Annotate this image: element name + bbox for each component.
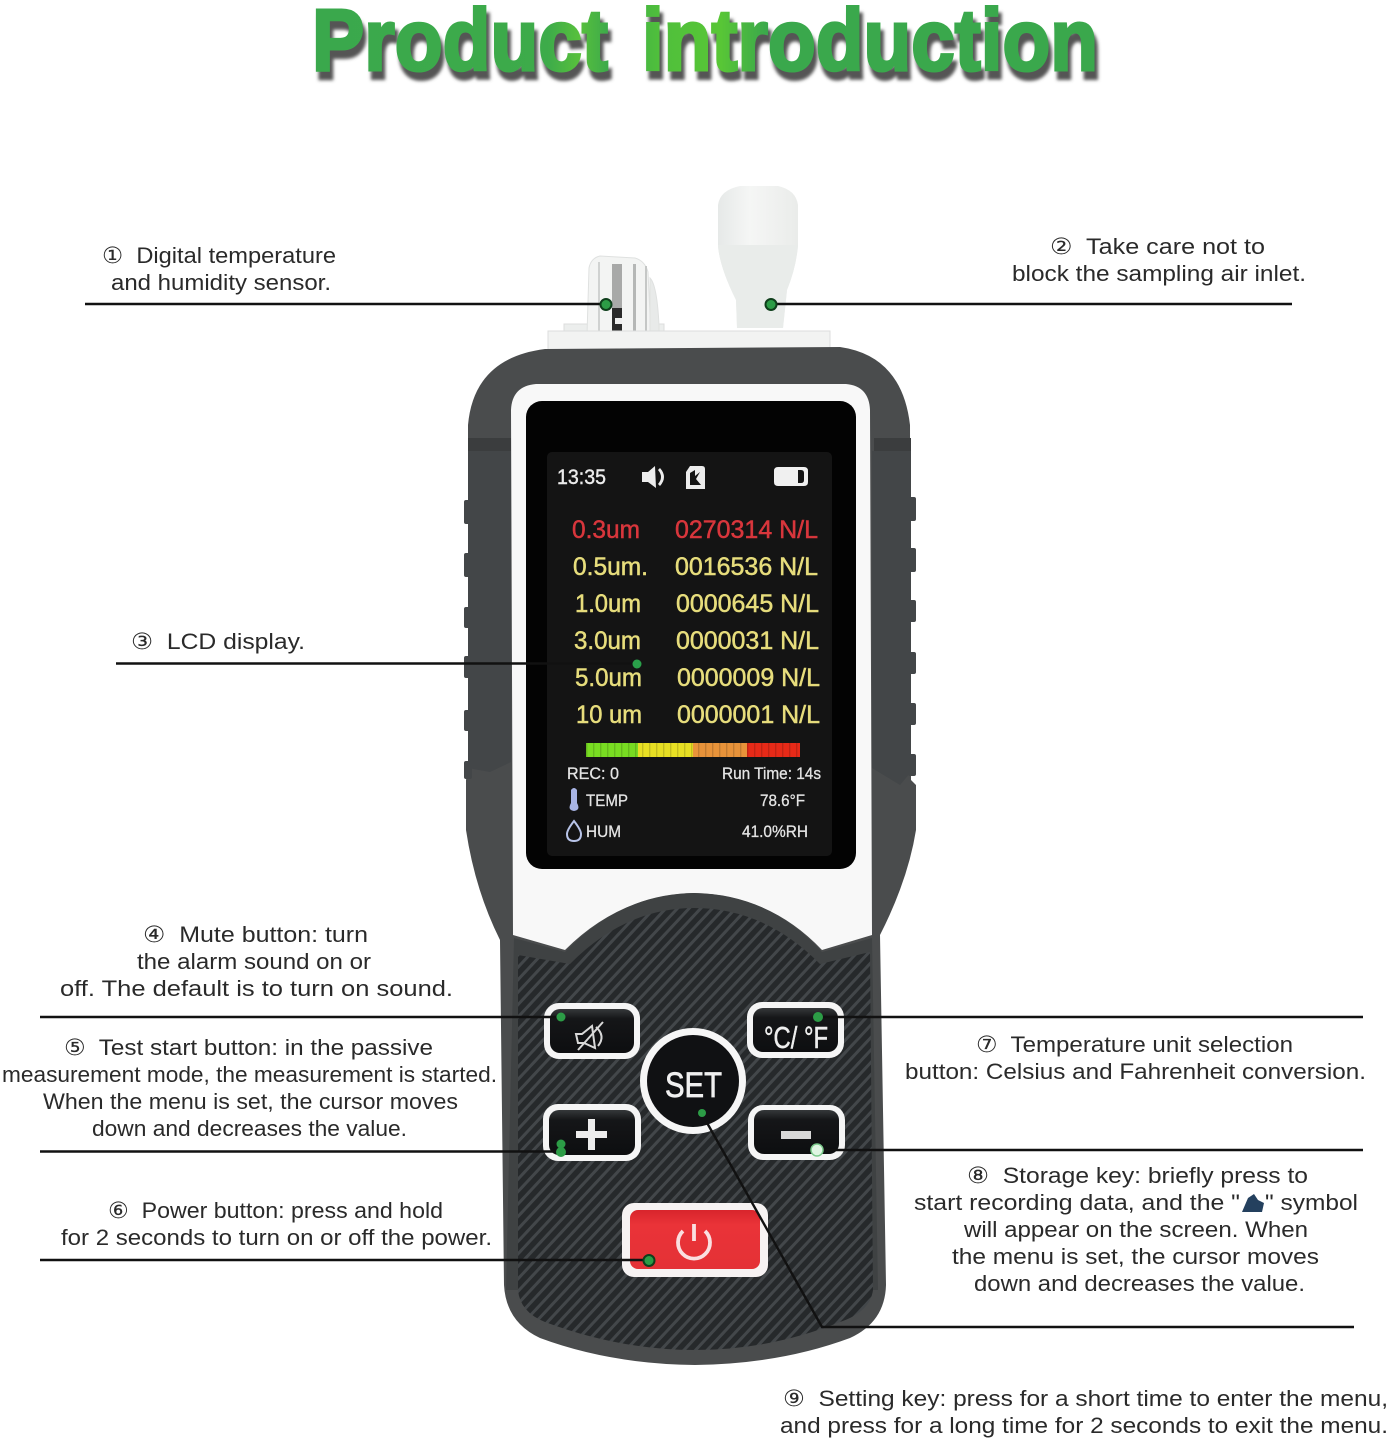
- annotation 8: storage key: " symbol: [1265, 1190, 1358, 1215]
- level bar: [586, 743, 800, 757]
- annotation 9: setting key: [780, 1386, 1388, 1438]
- particle rows: 3.0um: [574, 627, 641, 655]
- sampling air inlet: [718, 186, 798, 328]
- mute button: [544, 1003, 640, 1059]
- particle rows: 0000009 N/L: [677, 664, 820, 692]
- annotation 5: test start button: [2, 1035, 497, 1141]
- minus button: [748, 1105, 845, 1160]
- particle rows: 0.5um.: [573, 553, 648, 581]
- callout line 8: storage: [811, 1144, 1363, 1156]
- annotation 5: test start button: measurement mode, the measurement is started.: [2, 1062, 497, 1087]
- screen glass: [526, 401, 856, 869]
- top plate: [548, 331, 830, 353]
- annotation 4: mute button: [60, 922, 453, 1001]
- icon: SD card: [686, 466, 705, 489]
- temperature unit button: °C/ °F: [764, 1020, 828, 1055]
- annotation 9: setting key: ⑨ Setting key: press for a short time to enter the menu,: [783, 1386, 1388, 1411]
- status text: TEMP: [586, 791, 628, 810]
- status text: Run Time: 14s: [722, 764, 821, 783]
- SET button: [640, 1028, 746, 1134]
- annotation 4: mute button: the alarm sound on or: [137, 949, 372, 974]
- annotation 8: storage key: will appear on the screen. When: [963, 1217, 1308, 1242]
- icon: water drop: [567, 821, 581, 841]
- icon: battery: [774, 467, 808, 486]
- LCD readout: [547, 452, 832, 856]
- title: Product: [315, 0, 611, 97]
- annotation 7: temperature unit button: button: Celsius and Fahrenheit conversion.: [905, 1059, 1366, 1084]
- temperature unit button: [747, 1002, 844, 1058]
- callout line 6: power: [40, 1255, 654, 1266]
- icon: power: [678, 1224, 710, 1259]
- carbon fibre keypad panel: [518, 908, 873, 1350]
- particle rows: 0270314 N/L: [675, 516, 818, 544]
- annotation 1: temperature and humidity sensor: ① Digital temperature: [102, 243, 336, 268]
- particle rows: 1.0um: [575, 590, 641, 618]
- annotation 8: storage key: ⑧ Storage key: briefly press to: [967, 1163, 1308, 1188]
- power button: [622, 1203, 768, 1277]
- annotation 2: air inlet: [1012, 234, 1306, 286]
- annotation 3: LCD display: ③ LCD display.: [131, 629, 305, 654]
- annotation 1: temperature and humidity sensor: [102, 243, 336, 295]
- annotation 5: test start button: down and decreases the value.: [92, 1116, 407, 1141]
- particle rows: 0000645 N/L: [676, 590, 819, 618]
- particle rows: [572, 516, 820, 729]
- icon: storage symbol: [1242, 1194, 1264, 1212]
- annotation 8: storage key: [914, 1163, 1358, 1296]
- annotation 5: test start button: ⑤ Test start button: in the passive: [64, 1035, 433, 1060]
- title: introduction: [645, 0, 1101, 97]
- icon: muted speaker: [576, 1022, 603, 1050]
- annotation 6: power button: ⑥ Power button: press and hold: [108, 1198, 443, 1223]
- annotation 8: storage key: start recording data, and the ": [914, 1190, 1240, 1215]
- icon: thermometer: [570, 788, 578, 811]
- icon: speaker: [642, 466, 664, 488]
- callout line 4: mute: [40, 1012, 566, 1022]
- annotation 8: storage key: the menu is set, the cursor moves: [952, 1244, 1319, 1269]
- plus button: [543, 1104, 641, 1161]
- dark band around keypad: [506, 893, 878, 1290]
- SET button: SET: [665, 1066, 722, 1105]
- callout line 7: temperature unit: [813, 1012, 1363, 1022]
- status text: [567, 764, 821, 841]
- annotation 5: test start button: When the menu is set, the cursor moves: [43, 1089, 458, 1114]
- annotation 8: storage key: down and decreases the value.: [974, 1271, 1305, 1296]
- callout line 2: air inlet: [766, 299, 1292, 310]
- status text: 78.6°F: [760, 791, 805, 810]
- white bezel: [511, 384, 872, 950]
- callout line 9: setting: [698, 1109, 1354, 1327]
- status text: REC: 0: [567, 764, 619, 783]
- annotation 4: mute button: ④ Mute button: turn: [143, 922, 368, 947]
- annotation 4: mute button: off. The default is to turn on sound.: [60, 976, 453, 1001]
- callout line 1: sensor: [85, 299, 612, 310]
- annotation 9: setting key: and press for a long time for 2 seconds to exit the menu.: [780, 1413, 1388, 1438]
- callout line 3: LCD: [116, 660, 642, 668]
- particle rows: 0016536 N/L: [675, 553, 818, 581]
- particle rows: 0000031 N/L: [676, 627, 819, 655]
- annotation 2: air inlet: ② Take care not to: [1050, 234, 1265, 259]
- particle rows: 5.0um: [575, 664, 642, 692]
- annotation 6: power button: [61, 1198, 492, 1250]
- callout line 5: test start: [40, 1140, 566, 1157]
- annotation 7: temperature unit button: ⑦ Temperature unit selection: [976, 1032, 1293, 1057]
- LCD readout: 13:35: [557, 466, 606, 489]
- device: air particle counter: [464, 186, 916, 1365]
- annotation 7: temperature unit button: [905, 1032, 1366, 1084]
- particle rows: 10 um: [576, 701, 642, 729]
- device body: [466, 347, 916, 1365]
- status text: HUM: [586, 822, 621, 841]
- title: [312, 0, 1101, 97]
- particle rows: 0.3um: [572, 516, 640, 544]
- temperature and humidity sensor: [564, 256, 664, 336]
- annotation 1: temperature and humidity sensor: and humidity sensor.: [111, 270, 331, 295]
- annotation 2: air inlet: block the sampling air inlet.: [1012, 261, 1306, 286]
- side grips: [464, 438, 916, 785]
- annotation 6: power button: for 2 seconds to turn on or off the power.: [61, 1225, 492, 1250]
- particle rows: 0000001 N/L: [677, 701, 820, 729]
- status text: 41.0%RH: [742, 822, 808, 841]
